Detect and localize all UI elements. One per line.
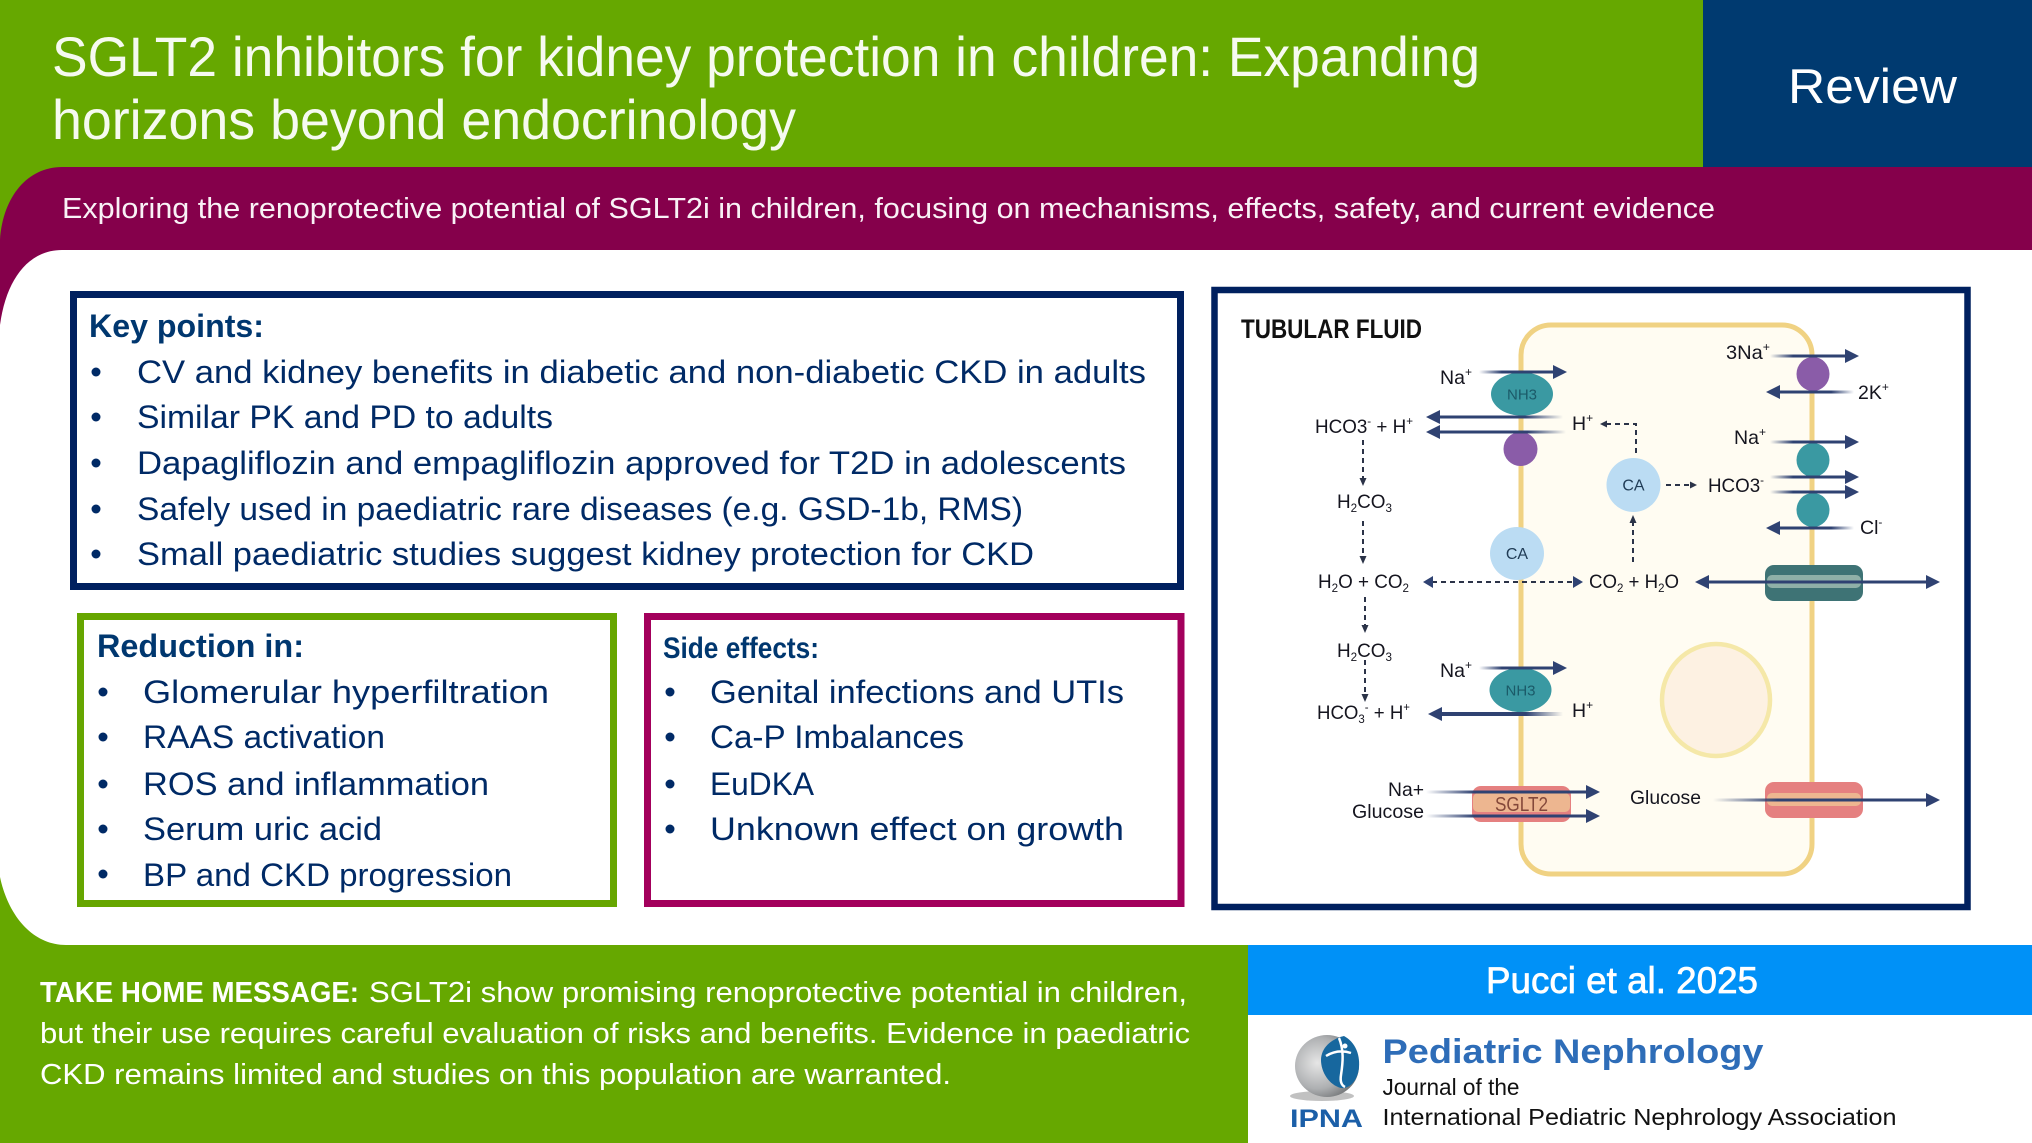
labels: intracellular species: H [1572,700,1586,722]
transporter: NH3 bottom [1490,668,1552,712]
labels: left column species: 2 [1403,581,1409,595]
list: side effects: EuDKA [710,766,815,802]
labels: intracellular species: - [1760,473,1764,487]
labels: basolateral species: + [1763,340,1770,354]
labels: basolateral species [1726,340,1889,539]
channel: glucose basolateral [1765,782,1863,818]
heading: key points: Key points: [89,308,264,344]
labels: basolateral species: + [1759,425,1766,439]
labels: left column species: HCO3 [1315,416,1369,438]
labels: left column species: Na+ [1388,779,1424,801]
transporter: NH3 top [1491,372,1553,416]
labels: left column species: + H [1371,416,1406,438]
transporter: teal basolateral lower [1796,493,1830,527]
list: reductions [98,674,549,893]
labels: intracellular species: HCO3 [1708,475,1762,497]
panel: tubular cell diagram [1214,290,1968,907]
list: reductions: BP and CKD progression [143,857,512,893]
panel: key points [74,294,1180,586]
labels: intracellular species: CO [1589,571,1618,593]
arrows: dashed reactions [1360,420,1697,702]
labels: left column species: + [1406,414,1413,428]
take home message: TAKE HOME MESSAGE: [40,977,359,1009]
labels: left column species: 2 [1351,650,1357,664]
list: reductions: ROS and inflammation [143,766,489,802]
labels: basolateral species: - [1878,515,1882,529]
panel: reduction in [80,616,614,904]
list: key points: Dapagliflozin and empagliflozin approved for T2D in adolescents [137,445,1126,481]
labels: left column species: + H [1369,702,1403,724]
transporter: NH3 top: NH3 [1507,386,1537,404]
channel: SGLT2: SGLT2 [1495,794,1548,816]
channel: SGLT2 [1472,786,1571,822]
citation bar: Pucci et al. 2025 [1486,960,1758,1001]
review badge: Review [1788,60,1958,114]
labels: left column species: HCO [1317,702,1360,724]
enzyme: CA membrane: CA [1506,546,1528,563]
labels: basolateral species: Cl [1860,517,1878,539]
main white panel [0,250,2032,945]
transporter: Na K pump [1796,357,1830,391]
heading: reduction in: Reduction in: [97,628,304,664]
labels: basolateral species: 3Na [1726,342,1762,364]
labels: basolateral species: 2K [1858,382,1882,404]
labels: left column species: H [1337,491,1351,513]
labels: intracellular species: + H [1623,571,1658,593]
labels: intracellular species: 2 [1617,581,1624,595]
enzyme: CA membrane [1490,527,1544,580]
labels: left column species: - [1367,414,1371,428]
subtitle band [0,167,2032,330]
list: reductions: Glomerular hyperfiltration [143,674,549,710]
labels: left column species: - [1365,700,1369,714]
journal name: Pediatric Nephrology [1382,1033,1764,1071]
labels: left column species: + [1465,658,1472,672]
labels: left column species: 3 [1386,501,1392,515]
list: reductions: RAAS activation [143,719,385,755]
title: SGLT2 inhibitors for kidney protection in children: Expanding [52,25,1480,88]
labels: intracellular species: 2 [1658,581,1665,595]
enzyme: CA intracellular: CA [1622,478,1645,494]
list: key points: Similar PK and PD to adults [137,399,553,435]
labels: intracellular species: + [1586,411,1593,425]
labels: basolateral species: + [1882,380,1889,394]
labels: left column species: Glucose [1352,801,1424,823]
list: reductions: Serum uric acid [143,811,382,847]
list: key points: Safely used in paediatric rare diseases (e.g. GSD-1b, RMS) [137,491,1023,527]
labels: left column species: CO [1357,491,1386,513]
enzyme: CA intracellular [1606,458,1660,512]
citation bar [1248,945,2032,1015]
title: horizons beyond endocrinology [52,88,796,151]
list: side effects: Unknown effect on growth [710,811,1124,847]
heading: side effects: Side effects: [663,632,819,665]
labels: intracellular species: O [1664,571,1679,593]
labels: left column species: 2 [1332,581,1338,595]
labels: intracellular species: H [1572,413,1586,435]
labels: left column species: 2 [1351,501,1357,515]
labels: left column species: 3 [1386,650,1392,664]
icon: IPNA logo [1290,1035,1359,1101]
diagram heading: TUBULAR FLUID [1241,314,1422,344]
subtitle band: Exploring the renoprotective potential of SGLT2i in children, focusing on mechanisms, effects, safety, and current evidence [62,193,1715,225]
panel: side effects [648,616,1181,904]
nucleus [1662,644,1770,756]
labels: left column species: CO [1357,640,1386,662]
labels: left column species: 3 [1358,712,1365,726]
logo wordmark: IPNA [1290,1105,1363,1133]
journal subtitle: Journal of the [1382,1074,1520,1100]
labels: left column species: O + CO [1338,571,1403,593]
list: side effects: Ca-P Imbalances [710,719,964,755]
labels: left column species [1315,365,1472,823]
arrows: solid transport [1426,349,1940,823]
labels: intracellular species [1572,411,1764,809]
journal panel [1248,1015,2032,1143]
list: side effects: Genital infections and UTIs [710,674,1124,710]
journal subtitle: International Pediatric Nephrology Association [1382,1104,1896,1130]
channel: water teal [1765,565,1863,601]
labels: left column species: H [1337,640,1351,662]
journal subtitle [1382,1074,1896,1130]
labels: left column species: + [1403,700,1410,714]
title [52,25,1480,151]
list: key points: CV and kidney benefits in diabetic and non-diabetic CKD in adults [137,354,1146,390]
labels: intracellular species: + [1586,698,1593,712]
take home message: CKD remains limited and studies on this population are warranted. [40,1059,951,1091]
transporter: purple apical [1504,432,1538,466]
labels: left column species: Na [1440,660,1465,682]
cell outline [1521,325,1812,874]
take home message: but their use requires careful evaluation of risks and benefits. Evidence in paediatric [40,1018,1190,1050]
labels: left column species: + [1465,365,1472,379]
labels: left column species: H [1318,571,1332,593]
take home message: SGLT2i show promising renoprotective potential in children, [369,977,1187,1009]
take home message [40,977,1190,1091]
labels: left column species: Na [1440,367,1465,389]
labels: basolateral species: Na [1734,427,1759,449]
transporter: NH3 bottom: NH3 [1505,682,1536,700]
labels: intracellular species: Glucose [1630,787,1701,809]
list: key points: Small paediatric studies suggest kidney protection for CKD [137,536,1034,572]
list: side effects [666,674,1124,847]
list: key points [92,354,1146,572]
review badge [1703,0,2032,168]
transporter: teal basolateral upper [1796,443,1830,477]
